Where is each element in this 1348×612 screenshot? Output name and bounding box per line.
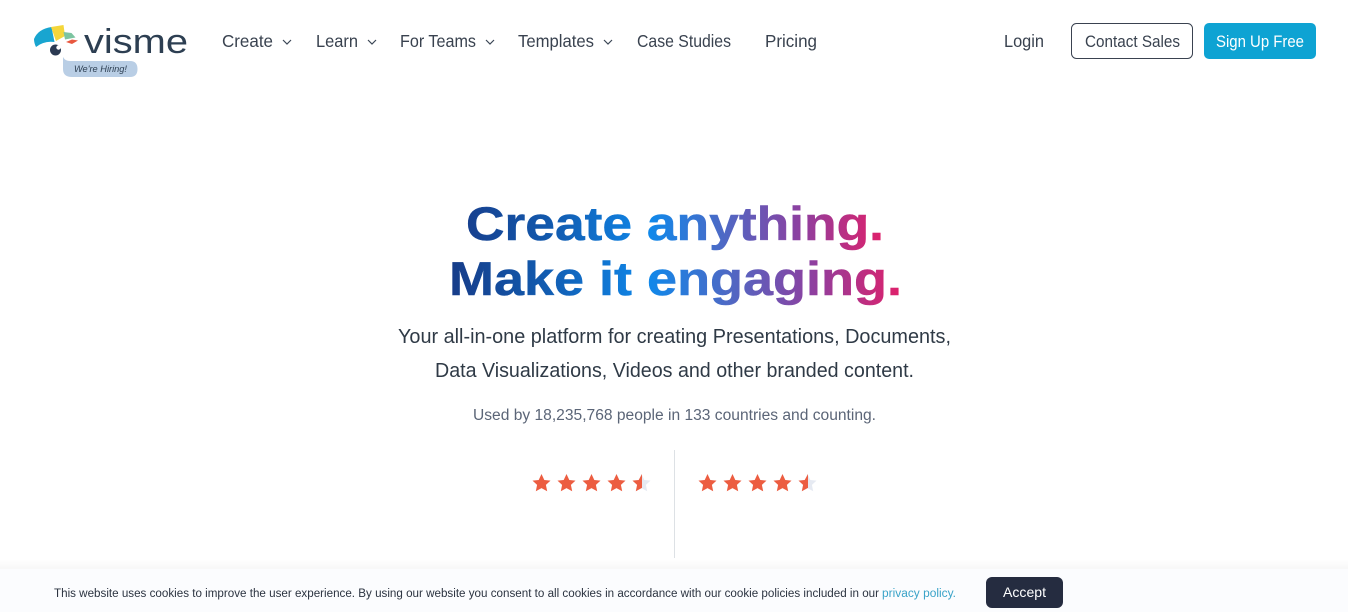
- button: Sign Up Free: [1204, 23, 1316, 59]
- subheading: [398, 326, 951, 382]
- privacy link: privacy policy.: [882, 588, 956, 600]
- button: Accept: Accept: [1003, 584, 1046, 600]
- cookie bar: [0, 569, 1348, 612]
- nav: Templates: Templates: [518, 31, 594, 51]
- subheading line 1: Your all-in-one platform for creating Presentations, Documents,: [398, 326, 951, 348]
- hiring badge: [63, 57, 138, 77]
- heading line 2: Make it engaging.: [449, 252, 902, 305]
- nav: Learn: Learn: [316, 31, 358, 51]
- usage statistic: Used by 18,235,768 people in 133 countries and counting.: [473, 407, 876, 424]
- button: Accept: [986, 577, 1063, 608]
- wordmark: visme: [84, 23, 188, 61]
- button: Contact Sales: Contact Sales: [1085, 33, 1180, 51]
- nav: Login: Login: [1004, 31, 1044, 51]
- cookie notice: This website uses cookies to improve the user experience. By using our website you consent to all cookies in accordance with our cookie policies included in our: [54, 588, 879, 600]
- subheading line 2: Data Visualizations, Videos and other branded content.: [435, 360, 914, 382]
- heading: [449, 197, 902, 305]
- button: Sign Up Free: Sign Up Free: [1216, 33, 1304, 51]
- heading line 1: Create anything.: [466, 197, 884, 250]
- nav: Case Studies: Case Studies: [637, 31, 731, 51]
- nav: For Teams: For Teams: [400, 31, 476, 51]
- rating divider: [674, 450, 675, 558]
- rating stars: left: [532, 474, 650, 491]
- logo: visme: [34, 23, 188, 77]
- icon: chameleon fan: [34, 25, 78, 56]
- button: Contact Sales: [1072, 24, 1192, 58]
- rating stars: right: [698, 474, 816, 491]
- navigation menu: [222, 31, 1044, 51]
- nav: Create: Create: [222, 31, 273, 51]
- hiring badge: We're Hiring!: [74, 64, 128, 74]
- nav: Pricing: Pricing: [765, 31, 817, 51]
